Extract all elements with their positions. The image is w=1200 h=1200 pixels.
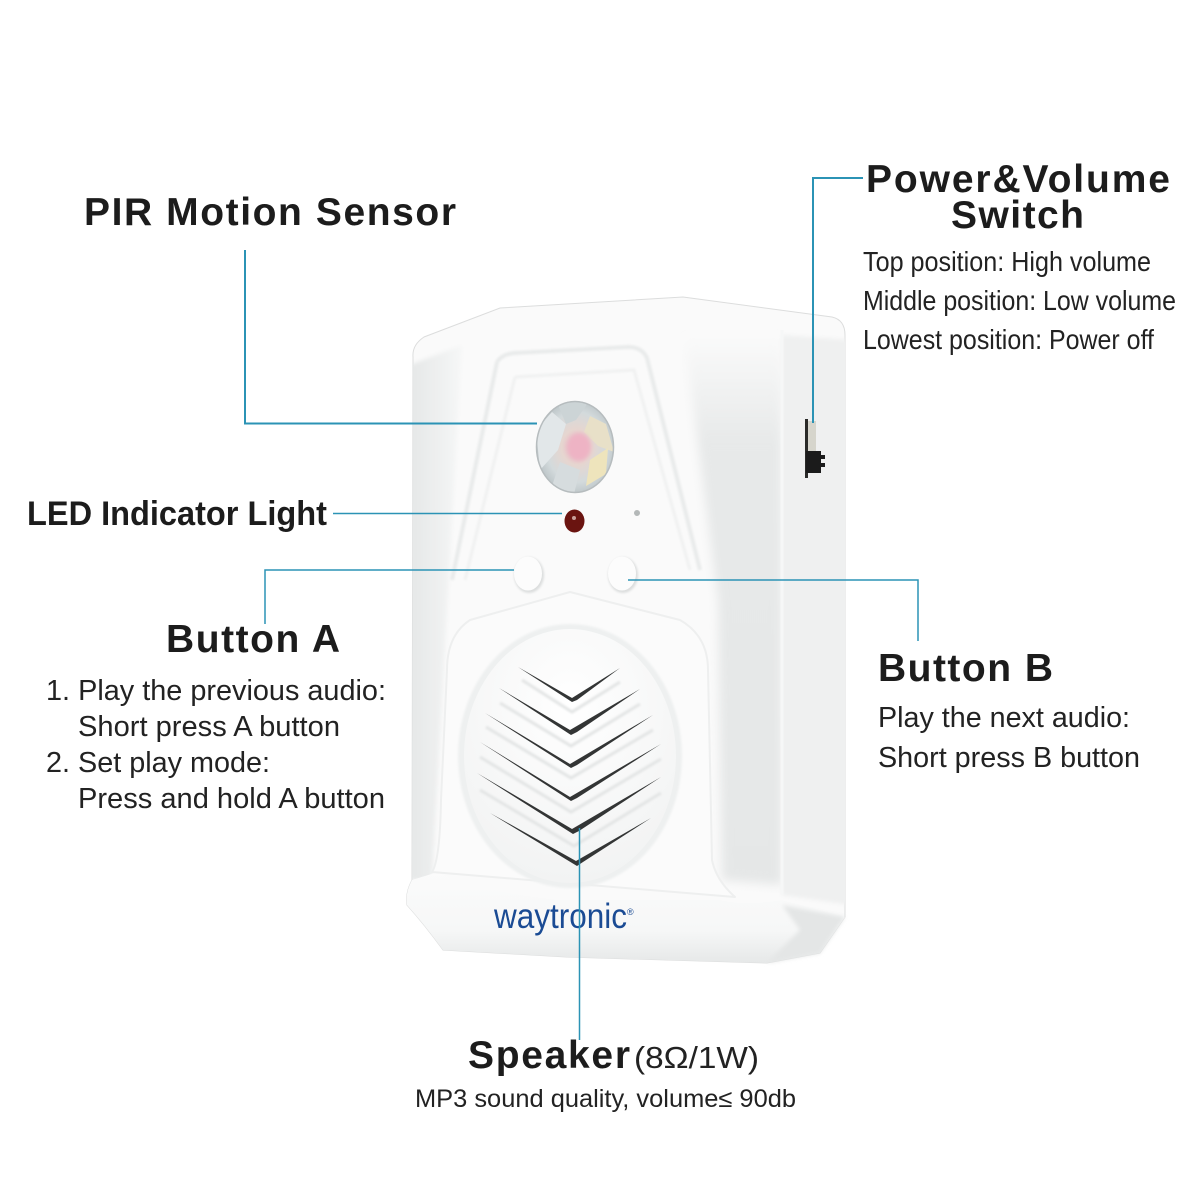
speaker grille disc [458, 624, 682, 888]
label: Button B: Button B [878, 647, 1053, 690]
speaker grille face [464, 629, 676, 883]
device shading [410, 330, 850, 910]
waytronic logo: ® [627, 907, 634, 917]
foot shadow [767, 905, 845, 963]
label: Button A: Button A [166, 618, 340, 661]
label: Button A: 2. Set play mode: [46, 747, 270, 779]
speaker slots [477, 667, 661, 866]
leader line: button B [628, 580, 918, 641]
heading: PIR Motion Sensor: PIR Motion Sensor [84, 191, 456, 234]
power and volume slide switch [805, 419, 825, 478]
label: Button A: Short press A button [78, 711, 340, 743]
label: Button A [46, 618, 386, 815]
leader line: switch [813, 178, 863, 423]
label: Button B: Short press B button [878, 742, 1140, 774]
label: Button B: Play the next audio: [878, 702, 1130, 734]
PIR lens [536, 400, 614, 494]
label: Power and Volume Switch: Switch [951, 194, 1084, 237]
label: Speaker [415, 1034, 796, 1113]
leader line: speaker [578, 828, 580, 1040]
sensor recess [452, 347, 700, 580]
label: Button A: 1. Play the previous audio: [46, 675, 386, 707]
speaker surround [432, 592, 735, 897]
label: Power and Volume Switch: Middle position: Low volume [863, 285, 1176, 316]
label: Button A: Press and hold A button [78, 783, 385, 815]
label: Speaker: (8Ω/1W) [634, 1040, 759, 1075]
button A [514, 556, 544, 593]
device body [407, 297, 845, 963]
leader line: PIR sensor [245, 250, 537, 424]
speaker ridge shading [480, 680, 661, 846]
label: Power and Volume Switch [863, 158, 1176, 355]
label: Power and Volume Switch: Lowest position: Power off [863, 324, 1154, 355]
label: Speaker: MP3 sound quality, volume≤ 90db [415, 1085, 796, 1113]
button B [608, 556, 638, 593]
label: Power and Volume Switch: Top position: High volume [863, 246, 1151, 277]
microphone hole [634, 510, 640, 516]
product: motion sensor speaker [407, 297, 850, 963]
label: Button B [878, 647, 1140, 774]
leader line: button A [265, 570, 514, 624]
label: Speaker: Speaker [468, 1034, 630, 1077]
LED indicator [564, 510, 584, 532]
foot ledge [407, 872, 845, 963]
leader line: LED [333, 512, 562, 514]
label: Power and Volume Switch: Power&Volume [866, 158, 1170, 201]
heading: LED Indicator Light: LED Indicator Light [27, 495, 327, 533]
waytronic logo: waytronic [493, 897, 627, 936]
